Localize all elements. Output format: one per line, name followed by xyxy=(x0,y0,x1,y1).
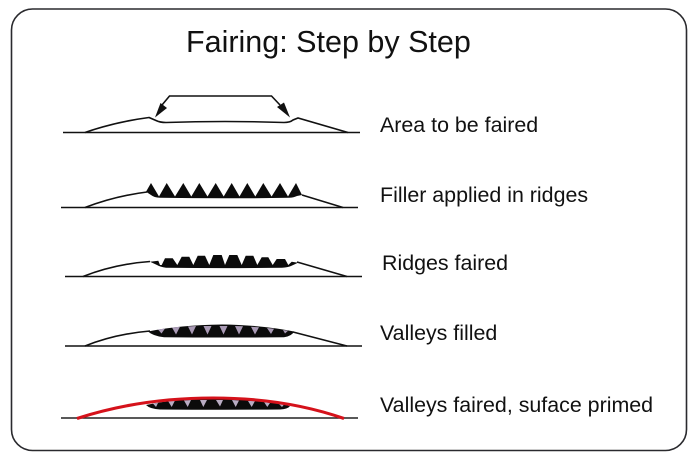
step 4: valleys filled xyxy=(65,321,497,346)
step 5: valleys faired, surface primed xyxy=(61,393,653,418)
step 3: ridges faired xyxy=(65,251,508,276)
title: Fairing: Step by Step xyxy=(186,25,471,59)
diagram: filled valleys xyxy=(65,324,362,346)
label: Valleys filled xyxy=(380,321,497,345)
step 1: area to be faired xyxy=(63,96,538,137)
label: Ridges faired xyxy=(382,251,508,275)
step 2: filler applied in ridges xyxy=(61,183,588,208)
label: Area to be faired xyxy=(380,113,538,137)
diagram: primed surface xyxy=(61,398,358,418)
label: Valleys faired, suface primed xyxy=(380,393,653,417)
label: Filler applied in ridges xyxy=(380,183,588,207)
arrows xyxy=(155,96,290,118)
diagram: faired area profile xyxy=(63,118,360,132)
diagram: filler ridges xyxy=(61,183,358,208)
diagram: faired ridges xyxy=(65,255,362,276)
